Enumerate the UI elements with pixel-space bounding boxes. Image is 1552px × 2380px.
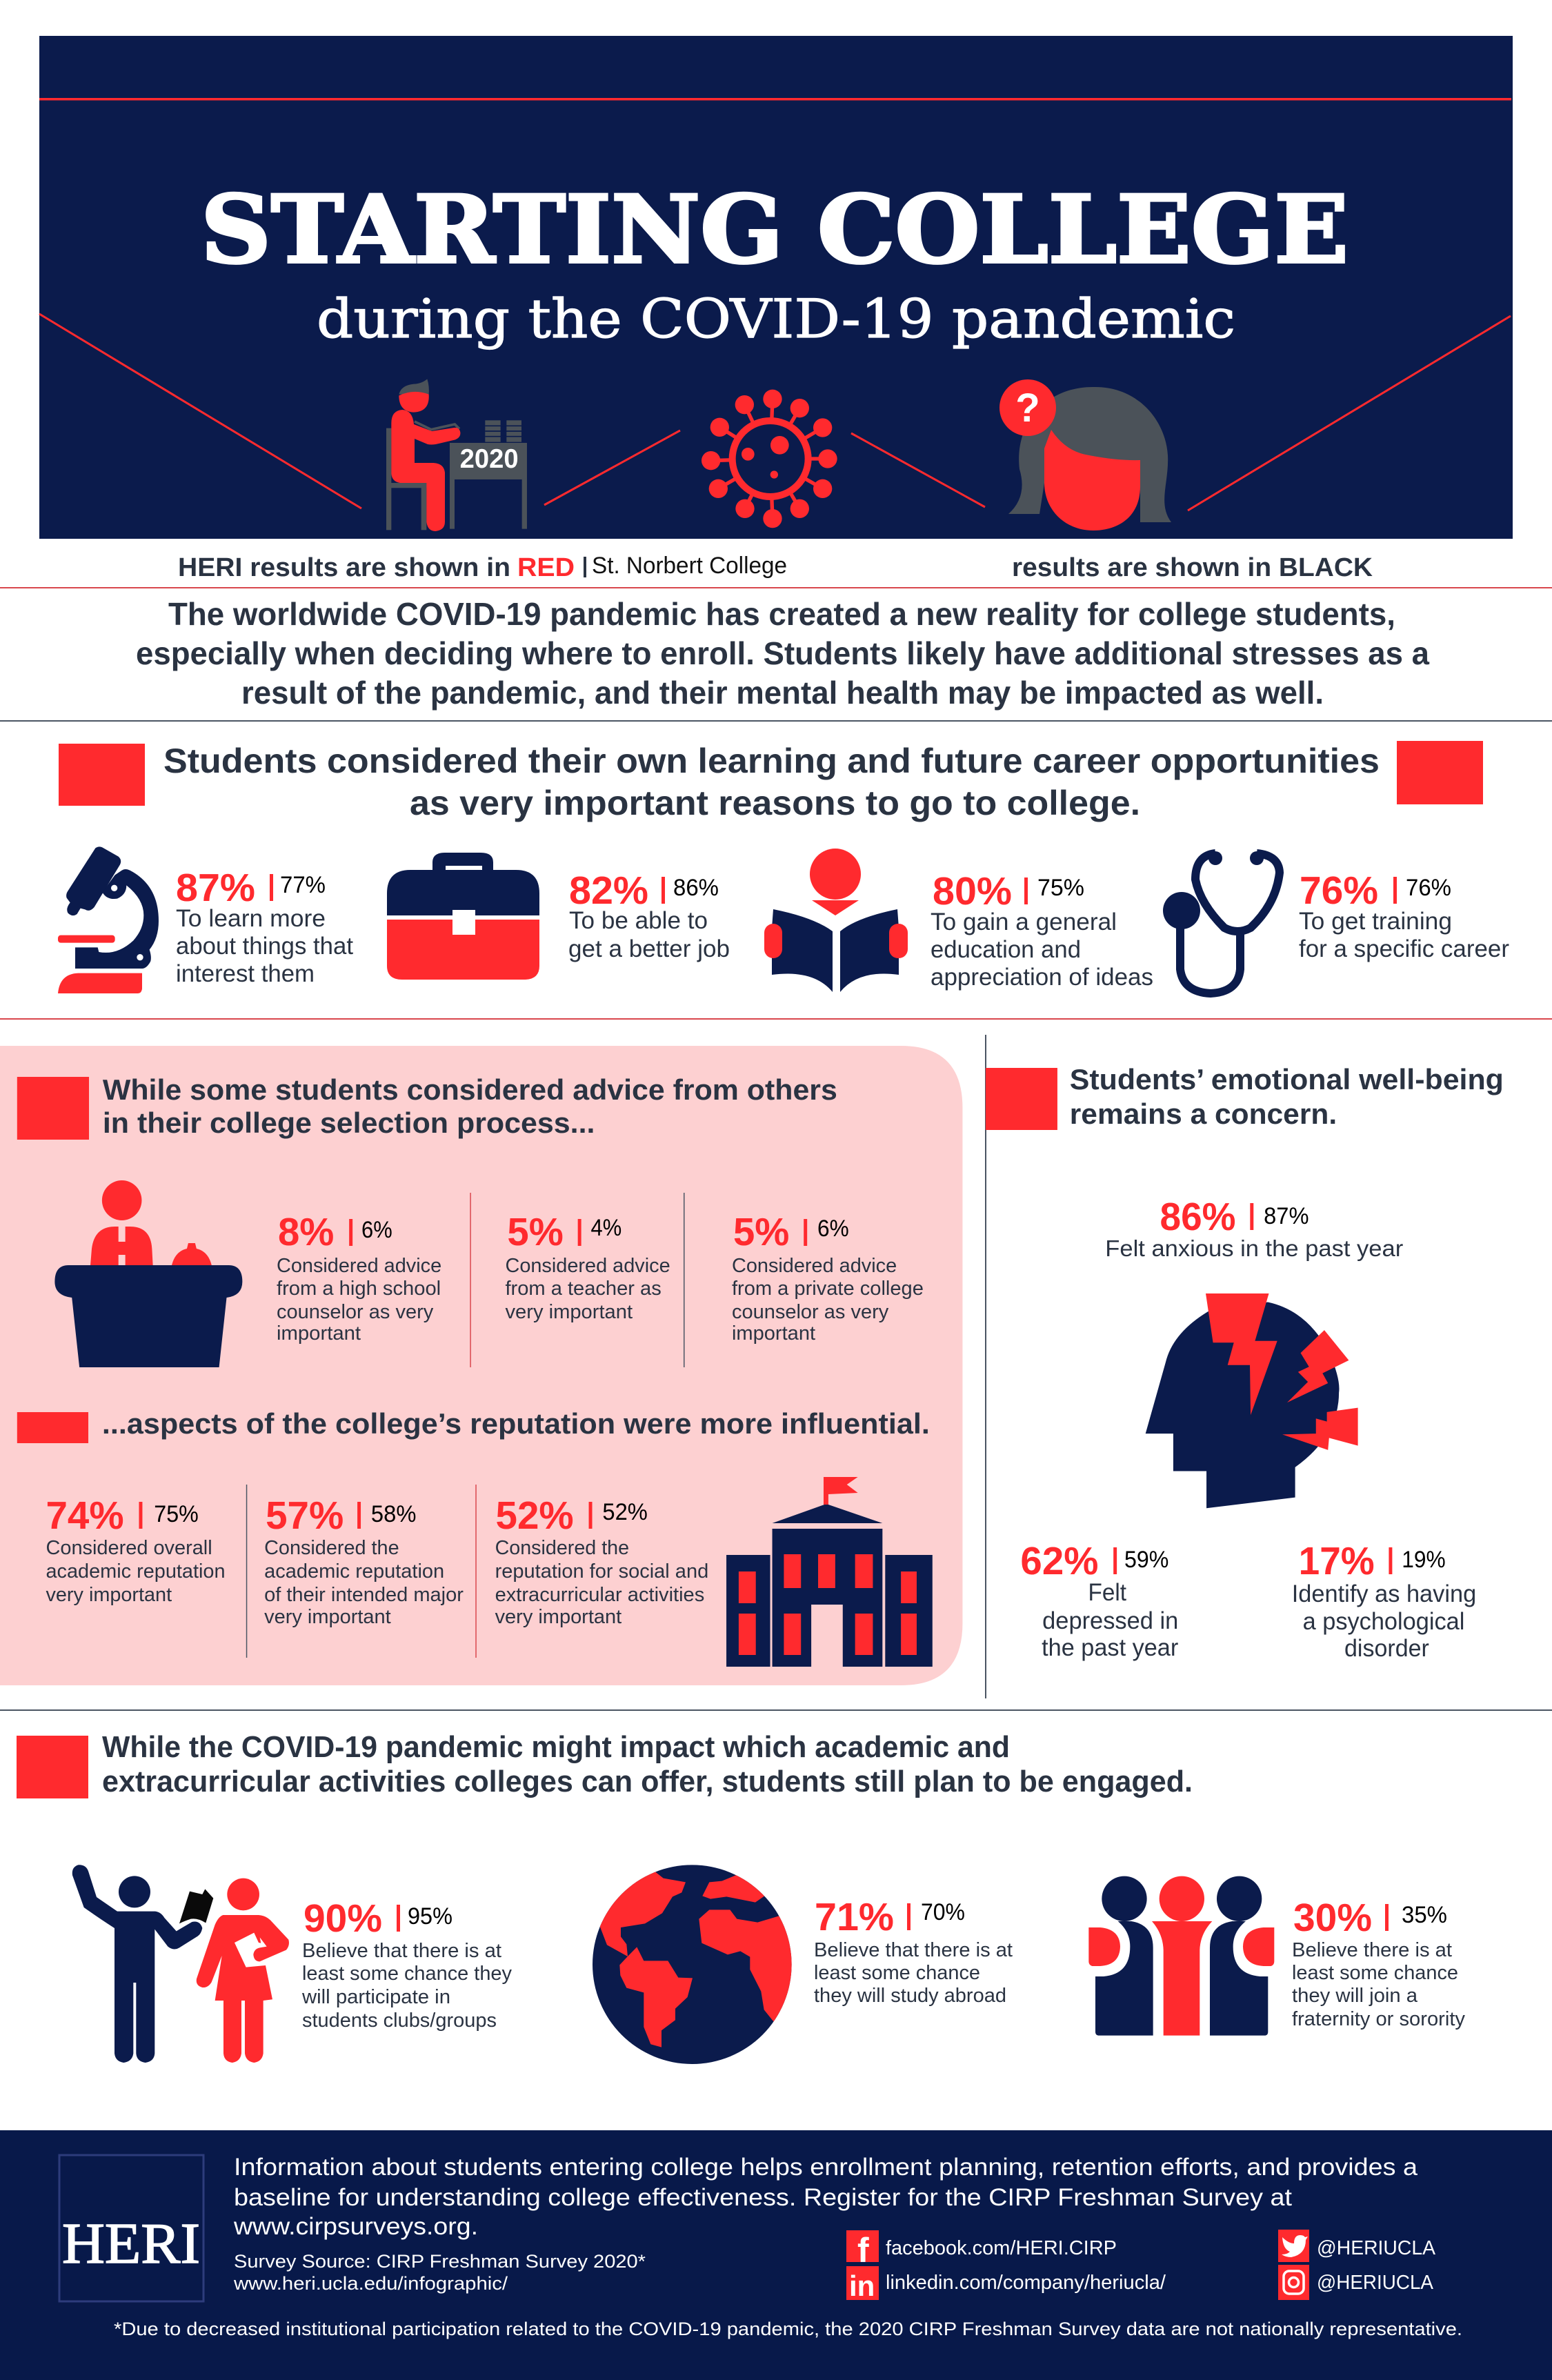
stat: 8%: from a high school <box>277 1278 441 1300</box>
stat: 8%: 8% <box>278 1211 334 1254</box>
stat: 71%: 70% <box>921 1899 965 1925</box>
stat: 52%: 52% <box>496 1494 574 1538</box>
stat: 5% teacher: from a teacher as <box>505 1278 661 1300</box>
icon: briefcase <box>387 853 539 980</box>
stat: 87% <box>176 866 353 987</box>
stat: 86%: 86% <box>1160 1196 1236 1239</box>
icon: counselor at podium <box>54 1180 242 1367</box>
stat: 30% <box>1292 1896 1465 2030</box>
stat: 62%: 59% <box>1124 1547 1168 1573</box>
stat: 82%: 86% <box>673 875 719 901</box>
stat: 90% <box>301 1896 512 2032</box>
stat: 5% private counselor: counselor as very <box>732 1301 889 1323</box>
stat: 86%: 87% <box>1264 1203 1309 1229</box>
stat: 17%: Identify as having <box>1292 1580 1476 1607</box>
stat: 87%: 87% <box>176 866 255 910</box>
intro text: The worldwide COVID-19 pandemic has created a new reality for college students, <box>168 596 1395 632</box>
stat: 52%: reputation for social and <box>495 1560 708 1583</box>
heading: engagement: While the COVID-19 pandemic might impact which academic and <box>102 1730 1010 1764</box>
stat: 76%: To get training <box>1299 908 1452 935</box>
stat: 80%: education and <box>931 936 1081 963</box>
stat: 82%: get a better job <box>568 935 730 962</box>
icon: two students with books <box>72 1865 289 2063</box>
social: facebook <box>846 2230 1117 2270</box>
heading: college reputation: ...aspects of the college’s reputation were more influential. <box>102 1407 930 1440</box>
stat: 30%: 35% <box>1402 1902 1447 1928</box>
stat: 71%: Believe that there is at <box>814 1939 1013 1961</box>
stat: 57%: Considered the <box>264 1537 399 1559</box>
stat: 90%: will participate in <box>301 1986 450 2008</box>
stat: 8%: 6% <box>361 1217 392 1243</box>
social: twitter <box>1278 2230 1436 2262</box>
stat: 5% teacher <box>505 1211 670 1323</box>
icon: head with lightning bolts <box>1146 1293 1358 1508</box>
stat: 57%: very important <box>264 1606 391 1628</box>
stat: 76%: 76% <box>1406 875 1451 901</box>
stat: 30%: 30% <box>1293 1896 1372 1940</box>
stat: 52%: extracurricular activities <box>495 1584 704 1606</box>
stat: 90%: 90% <box>304 1896 382 1941</box>
icon: virus <box>702 390 837 528</box>
stat: 76% <box>1299 869 1509 962</box>
stat: 57%: of their intended major <box>264 1584 464 1606</box>
stat: 17%: a psychological <box>1303 1608 1464 1635</box>
stat: 90%: least some chance they <box>302 1963 512 1985</box>
section heading <box>59 741 1483 822</box>
stat: 80%: 80% <box>933 869 1012 913</box>
subtitle: during the COVID-19 pandemic <box>317 288 1235 350</box>
panel: reasons to go to college <box>58 741 1509 993</box>
HERI logo <box>59 2155 203 2301</box>
icon: student at desk <box>386 379 527 531</box>
icon: microscope <box>58 846 159 993</box>
footnote: *Due to decreased institutional participation related to the COVID-19 pandemic, the 2020 CIRP Freshman Survey data are not nationally representative. <box>114 2319 1462 2339</box>
results legend: results are shown in BLACK <box>1012 553 1373 582</box>
stat: 52%: Considered the <box>495 1537 629 1559</box>
stat: 8%: important <box>277 1322 361 1345</box>
stat: 90%: Believe that there is at <box>302 1940 501 1962</box>
stat: 5% private counselor: important <box>732 1322 815 1345</box>
stat: 5% teacher: Considered advice <box>505 1255 670 1277</box>
stat: 17%: 19% <box>1402 1547 1446 1573</box>
stat: 30%: fraternity or sorority <box>1292 2008 1465 2030</box>
section heading: as very important reasons to go to college. <box>410 784 1140 822</box>
stat: 57%: 58% <box>371 1501 416 1527</box>
social: linkedin <box>846 2266 1166 2302</box>
stat: 90%: 95% <box>408 1903 452 1930</box>
stat: 62%: Felt <box>1088 1579 1126 1606</box>
stat: 74%: Considered overall <box>46 1537 212 1559</box>
stat: 74%: academic reputation <box>46 1560 226 1583</box>
heading: emotional well-being: remains a concern. <box>1070 1098 1337 1130</box>
stat: 17%: disorder <box>1344 1635 1429 1662</box>
stat: 5% private counselor: from a private college <box>732 1278 924 1300</box>
stat: 8% <box>277 1211 441 1345</box>
stat: 52% <box>495 1494 708 1628</box>
stat: 5% private counselor <box>732 1211 924 1345</box>
footer information text: www.cirpsurveys.org. <box>233 2213 478 2240</box>
stat: 80% <box>931 869 1153 991</box>
stat: 57% <box>264 1494 464 1628</box>
stat: 87%: To learn more <box>176 905 326 932</box>
panel: advice and reputation <box>0 1046 962 1685</box>
panel: student engagement <box>17 1730 1465 2064</box>
stat: 57%: academic reputation <box>264 1560 444 1583</box>
stat: 76%: 76% <box>1300 869 1378 913</box>
results legend: RED <box>517 553 575 582</box>
icon: stethoscope <box>1163 851 1280 993</box>
stat: 76%: for a specific career <box>1299 935 1509 962</box>
heading: emotional well-being <box>986 1063 1504 1130</box>
stat: 80%: To gain a general <box>931 909 1117 935</box>
icon: woman with question bubble: ? <box>1015 386 1040 430</box>
social: facebook: f <box>857 2231 869 2270</box>
stat: 71% <box>814 1895 1013 2007</box>
stat: 82%: 82% <box>569 869 648 913</box>
stat: 86% <box>1105 1196 1403 1261</box>
stat: 30%: they will join a <box>1292 1985 1418 2007</box>
stat: 17% <box>1292 1540 1476 1662</box>
section heading: Students considered their own learning and future career opportunities <box>163 742 1380 780</box>
icon: college building <box>726 1477 933 1667</box>
social: linkedin: linkedin.com/company/heriucla/ <box>886 2272 1166 2294</box>
stat: 74%: 74% <box>46 1494 124 1538</box>
panel: emotional well-being <box>986 1063 1504 1662</box>
HERI logo: HERI <box>62 2212 200 2276</box>
stat: 62%: depressed in <box>1042 1607 1178 1634</box>
stat: 52%: 52% <box>602 1499 648 1525</box>
footer information text: Survey Source: CIRP Freshman Survey 2020* <box>234 2251 646 2272</box>
stat: 74% <box>46 1494 226 1606</box>
stat: 82%: To be able to <box>569 907 708 934</box>
icon: fraternity group <box>1088 1876 1274 2036</box>
footer information text: Information about students entering college helps enrollment planning, retention efforts, and provides a <box>234 2154 1418 2181</box>
icon: woman with question bubble <box>999 379 1171 530</box>
footer <box>0 2130 1552 2380</box>
heading: engagement: extracurricular activities colleges can offer, students still plan to be engaged. <box>102 1765 1193 1798</box>
stat: 8%: Considered advice <box>277 1255 441 1277</box>
stat: 57%: 57% <box>266 1494 344 1538</box>
results legend <box>178 553 1373 582</box>
footer information text: baseline for understanding college effectiveness. Register for the CIRP Freshman Survey at <box>234 2184 1292 2211</box>
footer information text: www.heri.ucla.edu/infographic/ <box>233 2273 508 2294</box>
icon: globe <box>593 1863 800 2064</box>
social: instagram <box>1278 2265 1434 2300</box>
stat: 90%: students clubs/groups <box>302 2010 497 2032</box>
stat: 86%: Felt anxious in the past year <box>1105 1236 1403 1261</box>
icon: person reading book <box>764 849 908 992</box>
stat: 5% teacher: 5% <box>507 1211 564 1254</box>
stat: 82% <box>568 869 730 962</box>
stat: 87%: 77% <box>280 872 326 898</box>
header banner <box>39 36 1513 539</box>
stat: 8%: counselor as very <box>277 1301 434 1323</box>
stat: 5% teacher: very important <box>505 1301 633 1323</box>
stat: 74%: very important <box>46 1584 172 1606</box>
icon: student at desk: 2020 <box>460 444 519 474</box>
heading: advice from others: While some students considered advice from others <box>103 1073 837 1106</box>
heading: advice from others <box>17 1073 837 1140</box>
stat: 71%: least some chance <box>814 1962 980 1984</box>
title: STARTING COLLEGE <box>201 175 1349 284</box>
stat: 87%: interest them <box>176 960 315 987</box>
stat: 5% private counselor: 5% <box>733 1211 789 1254</box>
social: instagram: @HERIUCLA <box>1317 2272 1434 2294</box>
stat: 87%: about things that <box>176 933 353 960</box>
footer information text <box>233 2154 1418 2294</box>
stat: 30%: Believe there is at <box>1292 1939 1452 1961</box>
intro text: result of the pandemic, and their mental health may be impacted as well. <box>241 675 1324 711</box>
stat: 62% <box>1020 1540 1179 1661</box>
results legend: St. Norbert College <box>592 553 787 579</box>
results legend: HERI results are shown in <box>178 553 510 582</box>
intro text: especially when deciding where to enroll. Students likely have additional stresses as a <box>136 635 1429 671</box>
social: facebook: facebook.com/HERI.CIRP <box>886 2237 1117 2259</box>
stat: 5% private counselor: Considered advice <box>732 1255 897 1277</box>
heading: emotional well-being: Students’ emotional well-being <box>1070 1063 1504 1095</box>
stat: 62%: 62% <box>1020 1540 1098 1583</box>
stat: 5% teacher: 4% <box>591 1215 621 1241</box>
stat: 71%: they will study abroad <box>814 1985 1006 2007</box>
stat: 74%: 75% <box>154 1501 199 1527</box>
stat: 80%: appreciation of ideas <box>931 964 1153 991</box>
heading: engagement <box>17 1730 1193 1798</box>
stat: 62%: the past year <box>1042 1634 1179 1661</box>
social: twitter: @HERIUCLA <box>1317 2237 1436 2259</box>
social: linkedin: in <box>849 2270 875 2302</box>
stat: 30%: least some chance <box>1292 1962 1458 1984</box>
stat: 52%: very important <box>495 1606 621 1628</box>
heading: advice from others: in their college selection process... <box>103 1107 595 1139</box>
stat: 71%: 71% <box>815 1895 894 1939</box>
intro text <box>136 596 1429 711</box>
stat: 80%: 75% <box>1037 875 1084 901</box>
stat: 5% private counselor: 6% <box>817 1216 849 1242</box>
stat: 17%: 17% <box>1299 1540 1375 1583</box>
